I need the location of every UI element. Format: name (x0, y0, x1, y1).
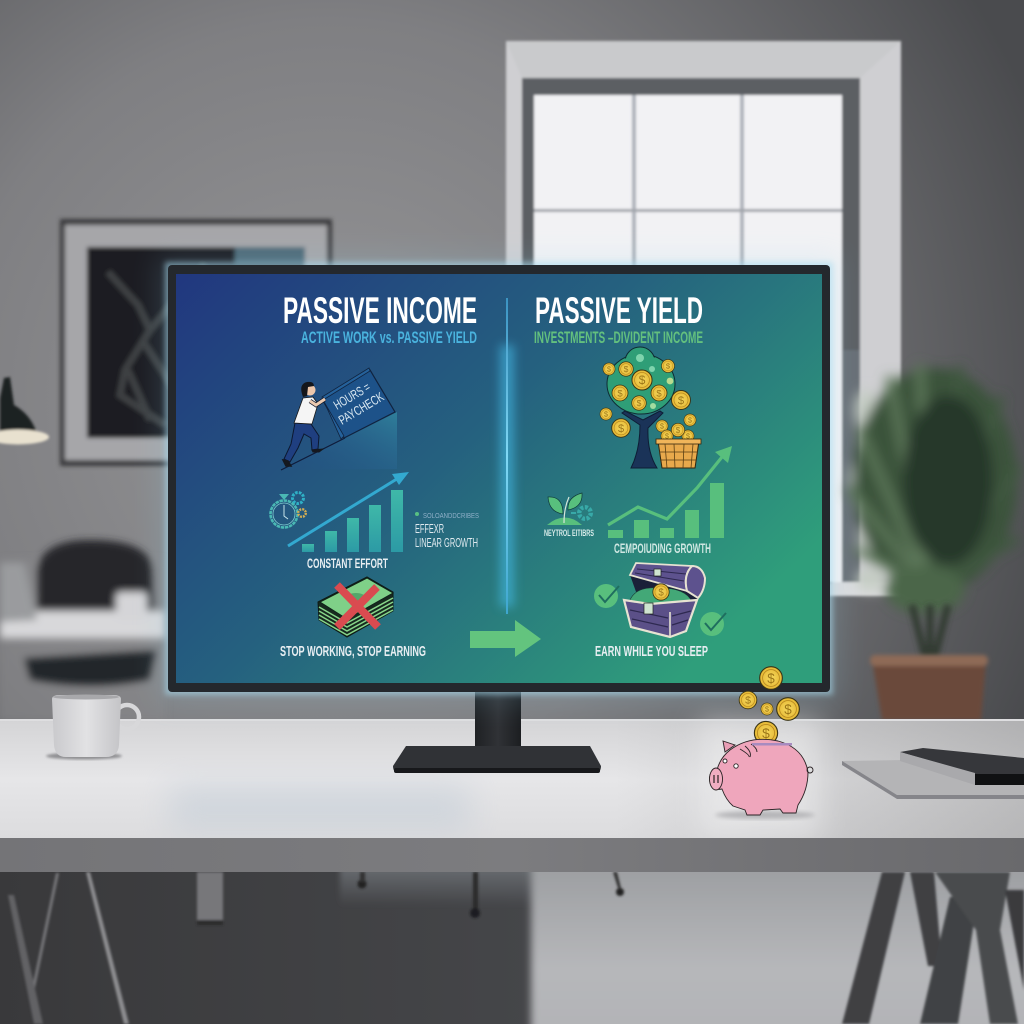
chart legend text: SOLOANDDCRIBES (423, 511, 479, 520)
icon: treasure chest (624, 563, 705, 637)
laptop and notebook on table (842, 748, 1024, 799)
bar chart: compounding growth (608, 446, 732, 538)
icon: sprout and gear (544, 493, 594, 538)
bar chart: linear growth (288, 472, 409, 552)
label: stop working, stop earning: STOP WORKING, STOP EARNING (280, 644, 426, 660)
man (283, 382, 325, 466)
center divider line (500, 298, 514, 614)
label: compounding growth: CEMPOIUDING GROWTH (614, 540, 711, 556)
paycheck block: HOURS = (331, 379, 373, 413)
arrow: green transition arrow (470, 620, 541, 657)
screen panel (176, 274, 822, 683)
chest lid (630, 563, 692, 591)
wall lamp (0, 377, 49, 444)
floor and table legs (0, 860, 1024, 1024)
monitor glow (158, 256, 840, 702)
window (506, 41, 901, 596)
label: constant effort: CONSTANT EFFORT (307, 555, 388, 571)
chart legend text: LINEAR GROWTH (415, 536, 478, 550)
paycheck block: PAYCHECK (336, 389, 387, 428)
background desk and chair (0, 540, 166, 720)
icon: money tree with basket (600, 347, 701, 468)
icon: man pushing block up slope (281, 368, 397, 470)
piggy bank (710, 739, 813, 815)
coffee mug (46, 694, 139, 760)
monitor bezel (168, 265, 830, 692)
left heading (283, 290, 477, 347)
left heading: ACTIVE WORK vs. PASSIVE YIELD (301, 329, 477, 347)
table top (0, 719, 1024, 872)
icon: falling coins and piggy bank (710, 667, 815, 819)
chart legend text (415, 511, 479, 550)
icon: check badges (594, 584, 726, 636)
monitor stand (393, 690, 601, 773)
blurred plant (848, 368, 1018, 720)
chart legend text: EFFEXR (415, 522, 444, 536)
chest interior (630, 575, 698, 605)
icon: crossed out cash stack (318, 577, 393, 637)
wall picture frame (60, 219, 332, 466)
left heading: PASSIVE INCOME (283, 290, 477, 331)
icon: stopwatch and gears (270, 492, 306, 528)
right heading: PASSIVE YIELD (535, 290, 703, 331)
label: earn while you sleep: EARN WHILE YOU SLEEP (595, 644, 708, 660)
money pile (630, 588, 692, 606)
icon: sprout and gear: NEYTROL EITIBRS (544, 528, 594, 538)
right heading: INVESTMENTS –DIVIDENT INCOME (534, 329, 703, 347)
paycheck block (322, 368, 395, 439)
right heading (534, 290, 703, 347)
chest body (624, 600, 697, 637)
